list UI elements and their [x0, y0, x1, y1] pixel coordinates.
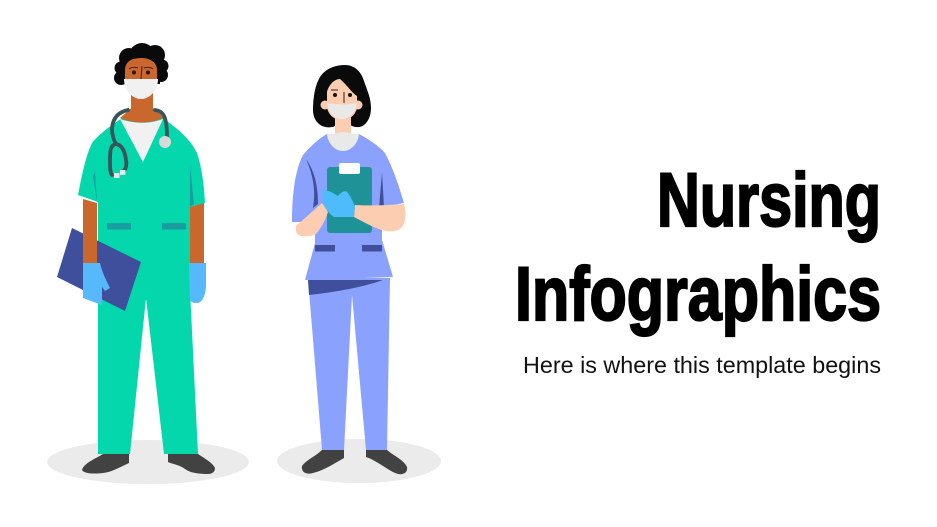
mask: male nurse: [124, 79, 158, 99]
facial features: male nurse: [129, 66, 153, 79]
undershirt: male nurse: [120, 119, 163, 162]
collar: female nurse: [327, 132, 359, 151]
sleeve folds: male nurse: [93, 165, 194, 207]
illustration: male nurse: [47, 43, 249, 484]
pockets: female nurse: [315, 245, 382, 252]
mask: female nurse: [327, 103, 357, 119]
floor shadow: female nurse: [277, 439, 441, 483]
sleeve folds: female nurse: [306, 159, 384, 208]
trousers: male nurse: [98, 290, 198, 454]
shoes: female nurse: [302, 450, 407, 474]
stethoscope: [110, 110, 171, 178]
clipboard clip: [339, 163, 360, 174]
illustration: female nurse: [277, 65, 441, 483]
shoes: male nurse: [82, 454, 215, 474]
hair: male nurse: [114, 43, 168, 85]
hair: female nurse: [313, 65, 371, 127]
arms: male nurse: [83, 199, 204, 266]
facial features: female nurse: [331, 90, 352, 103]
title line 1: Nursing: [657, 158, 881, 243]
neck: female nurse: [335, 112, 351, 136]
face: female nurse: [327, 79, 357, 120]
shadow under tunic: [308, 280, 383, 295]
gloves: male nurse: [83, 263, 206, 305]
floor shadow: male nurse: [47, 440, 249, 484]
face: male nurse: [125, 58, 157, 80]
clipboard: male nurse: [57, 228, 141, 311]
scrub top: male nurse: [78, 118, 205, 300]
trousers: female nurse: [308, 278, 390, 450]
clipboard: female nurse: [327, 167, 372, 233]
glove: female nurse: [322, 190, 355, 217]
arms: female nurse: [296, 203, 405, 236]
ears: female nurse: [320, 100, 362, 110]
neck: male nurse: [120, 90, 163, 122]
scrub top: female nurse: [292, 134, 404, 280]
pockets: male nurse: [107, 223, 186, 230]
subtitle: Here is where this template begins: [523, 352, 881, 378]
title: [515, 158, 881, 337]
